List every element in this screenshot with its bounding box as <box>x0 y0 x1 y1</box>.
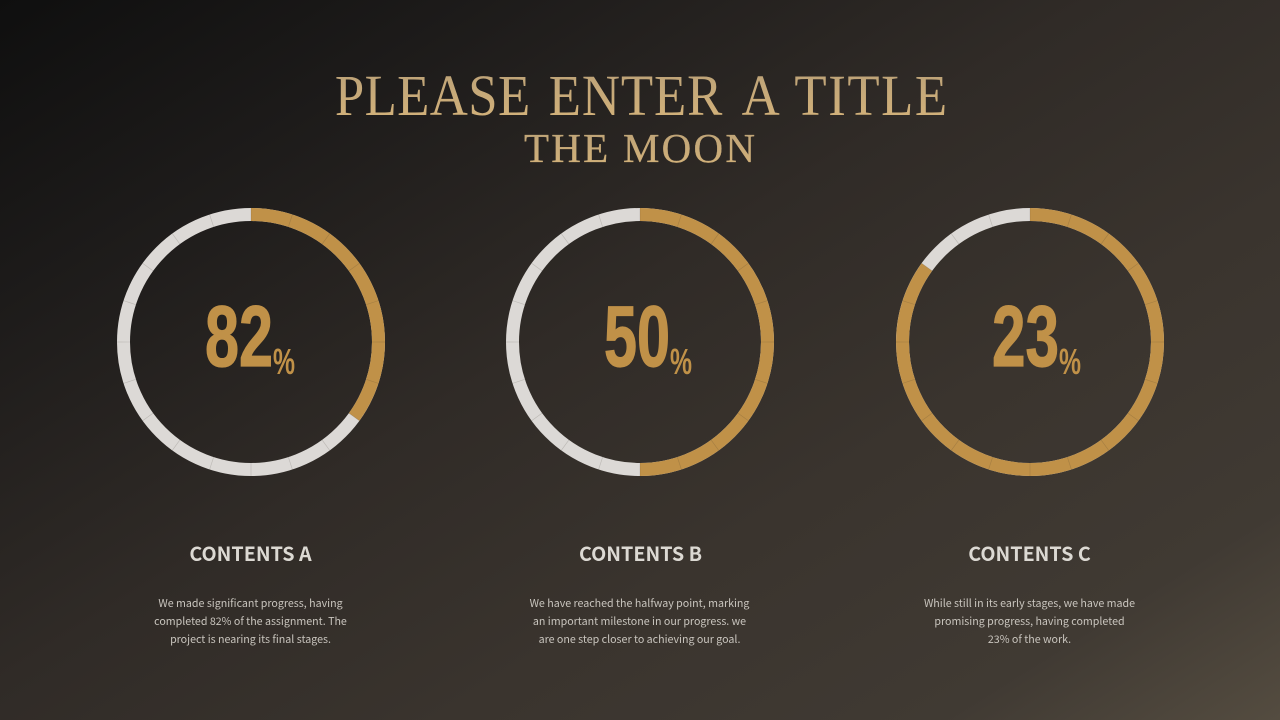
text: contents A <box>154 596 347 647</box>
unit: percent: % <box>273 341 295 382</box>
text: contents B: are one step closer to achieving our goal. <box>539 632 740 647</box>
text: contents B: an important milestone in our progress. we <box>533 614 746 629</box>
text: contents A: completed 82% of the assignment. The <box>154 614 347 629</box>
title: TITLE <box>794 64 949 128</box>
text: contents C: 23% of the work. <box>988 632 1071 647</box>
heading: contents A: CONTENTS A <box>189 538 312 567</box>
value: 82: 82 <box>205 289 273 385</box>
text: contents B: We have reached the halfway point, marking <box>530 596 749 611</box>
text: contents C: While still in its early stages, we have made <box>924 596 1135 611</box>
value: 50: 50 <box>604 289 670 385</box>
text: contents A: We made significant progress, having <box>158 596 343 611</box>
text: contents B <box>530 596 750 647</box>
subtitle: THE MOON <box>524 125 755 171</box>
ring chart: 82% <box>124 214 378 470</box>
ring chart: 50% <box>512 214 768 470</box>
value: 23: 23 <box>992 289 1059 385</box>
unit: percent: % <box>1059 341 1081 382</box>
ring chart: 23% <box>902 214 1158 470</box>
heading: contents B: CONTENTS B <box>579 538 702 567</box>
text: contents C <box>924 596 1135 647</box>
title: PLEASE <box>335 64 531 128</box>
title: ENTER <box>549 64 723 128</box>
title: A <box>742 64 780 128</box>
text: contents C: promising progress, having completed <box>934 614 1125 629</box>
unit: percent: % <box>670 341 692 382</box>
text: contents A: project is nearing its final stages. <box>170 632 331 647</box>
heading: contents C: CONTENTS C <box>968 538 1091 567</box>
